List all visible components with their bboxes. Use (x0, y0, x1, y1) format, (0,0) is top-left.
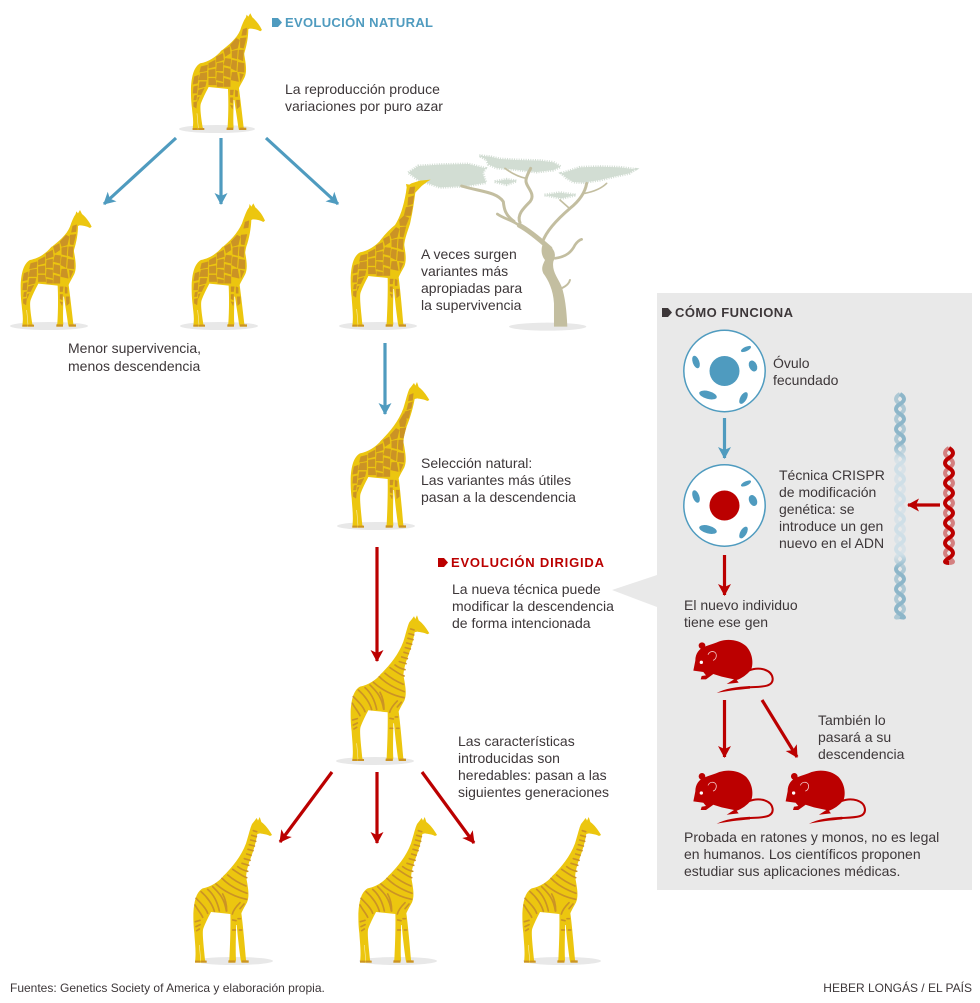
heading: evolución dirigida: EVOLUCIÓN DIRIGIDA (451, 555, 605, 570)
text: menor supervivencia: menos descendencia (68, 358, 201, 374)
tree: acacia (408, 156, 635, 331)
text: a veces surgen (421, 246, 522, 313)
text: selección natural: Selección natural: (421, 455, 532, 471)
giraffe: parent (179, 13, 262, 133)
arrow: to right striped offspring (422, 772, 474, 843)
text: el nuevo individuo: El nuevo individuo (684, 597, 798, 613)
arrow: to natural selection (383, 343, 387, 414)
giraffe: left offspring (10, 210, 92, 330)
text: la reproducción (285, 81, 443, 114)
text: probada en ratones (684, 829, 939, 879)
icon: offspring mouse right (786, 771, 865, 824)
text: técnica crispr: introduce un gen (779, 518, 883, 534)
icon: red dna strand (945, 448, 953, 563)
text: la nueva técnica (452, 581, 614, 631)
text: la reproducción: La reproducción produce (285, 81, 440, 97)
giraffe: striped offspring right (522, 817, 601, 965)
text: técnica crispr: nuevo en el ADN (779, 535, 884, 551)
arrow: to middle striped offspring (375, 772, 379, 843)
text: selección natural: pasan a la descendencia (421, 489, 576, 505)
text: las características: siguientes generaciones (458, 784, 609, 800)
text: la nueva técnica: de forma intencionada (452, 615, 591, 631)
arrow: mouse diagonal (762, 700, 797, 757)
arrow: to right offspring (266, 138, 338, 204)
icon: modified egg cell (684, 465, 765, 546)
footer: sources: Fuentes: Genetics Society of America y elaboración propia. (10, 981, 325, 995)
giraffe: striped offspring left (193, 817, 273, 965)
footer: credit: HEBER LONGÁS / EL PAÍS (823, 980, 972, 995)
text: a veces surgen: variantes más (421, 263, 508, 279)
text: menor supervivencia (68, 340, 201, 374)
arrow: to left striped offspring (280, 772, 332, 842)
panel: cómo funciona background (612, 293, 972, 890)
text: las características: Las características (458, 733, 575, 749)
text: técnica crispr (779, 467, 885, 551)
giraffe: striped parent (336, 615, 429, 765)
text: también lo pasará: pasará a su (818, 729, 891, 745)
arrow: gene insertion (908, 503, 940, 507)
icon: parent mouse (693, 640, 773, 693)
text: óvulo fecundado (773, 355, 839, 388)
icon: fertilized egg cell (684, 330, 765, 412)
text: también lo pasará: descendencia (818, 746, 905, 762)
text: el nuevo individuo: tiene ese gen (684, 614, 768, 630)
text: técnica crispr: de modificación (779, 484, 876, 500)
text: técnica crispr: Técnica CRISPR (779, 467, 885, 483)
text: óvulo fecundado: fecundado (773, 372, 839, 388)
text: las características (458, 733, 609, 800)
arrow: cell to cell (723, 418, 726, 458)
text: el nuevo individuo (684, 597, 798, 630)
arrow: to middle offspring (219, 138, 223, 204)
text: selección natural (421, 455, 576, 505)
arrow: cell to new individual (723, 555, 726, 595)
text: la nueva técnica: La nueva técnica puede (452, 581, 601, 597)
text: menor supervivencia: Menor supervivencia, (68, 340, 201, 356)
text: óvulo fecundado: Óvulo (773, 355, 810, 371)
icon: offspring mouse left (693, 771, 773, 824)
text: la nueva técnica: modificar la descendencia (452, 598, 614, 614)
heading: cómo funciona: CÓMO FUNCIONA (675, 305, 794, 320)
arrow: to left offspring (104, 138, 176, 204)
text: probada en ratones: Probada en ratones y monos, no es legal (684, 829, 939, 845)
text: técnica crispr: genética: se (779, 501, 855, 517)
giraffe: eating from tree (339, 180, 431, 330)
text: las características: introducidas son (458, 750, 560, 766)
heading: evolución natural: EVOLUCIÓN NATURAL (285, 15, 433, 30)
text: probada en ratones: estudiar sus aplicaciones médicas. (684, 863, 900, 879)
icon: blue dna strand (896, 394, 904, 618)
text: la reproducción: variaciones por puro azar (285, 98, 443, 114)
text: a veces surgen: apropiadas para (421, 280, 522, 296)
text: probada en ratones: en humanos. Los científicos proponen (684, 846, 921, 862)
giraffe: middle offspring (180, 203, 265, 330)
text: las características: heredables: pasan a las (458, 767, 607, 783)
giraffe: striped offspring middle (358, 817, 437, 965)
text: también lo pasará: También lo (818, 712, 886, 728)
text: selección natural: Las variantes más útiles (421, 472, 571, 488)
arrow: to directed giraffe (375, 547, 379, 661)
giraffe: natural selection (337, 382, 429, 530)
text: a veces surgen: A veces surgen (421, 246, 517, 262)
arrow: mouse down (723, 700, 726, 757)
text: a veces surgen: la supervivencia (421, 297, 522, 313)
text: también lo pasará (818, 712, 905, 762)
